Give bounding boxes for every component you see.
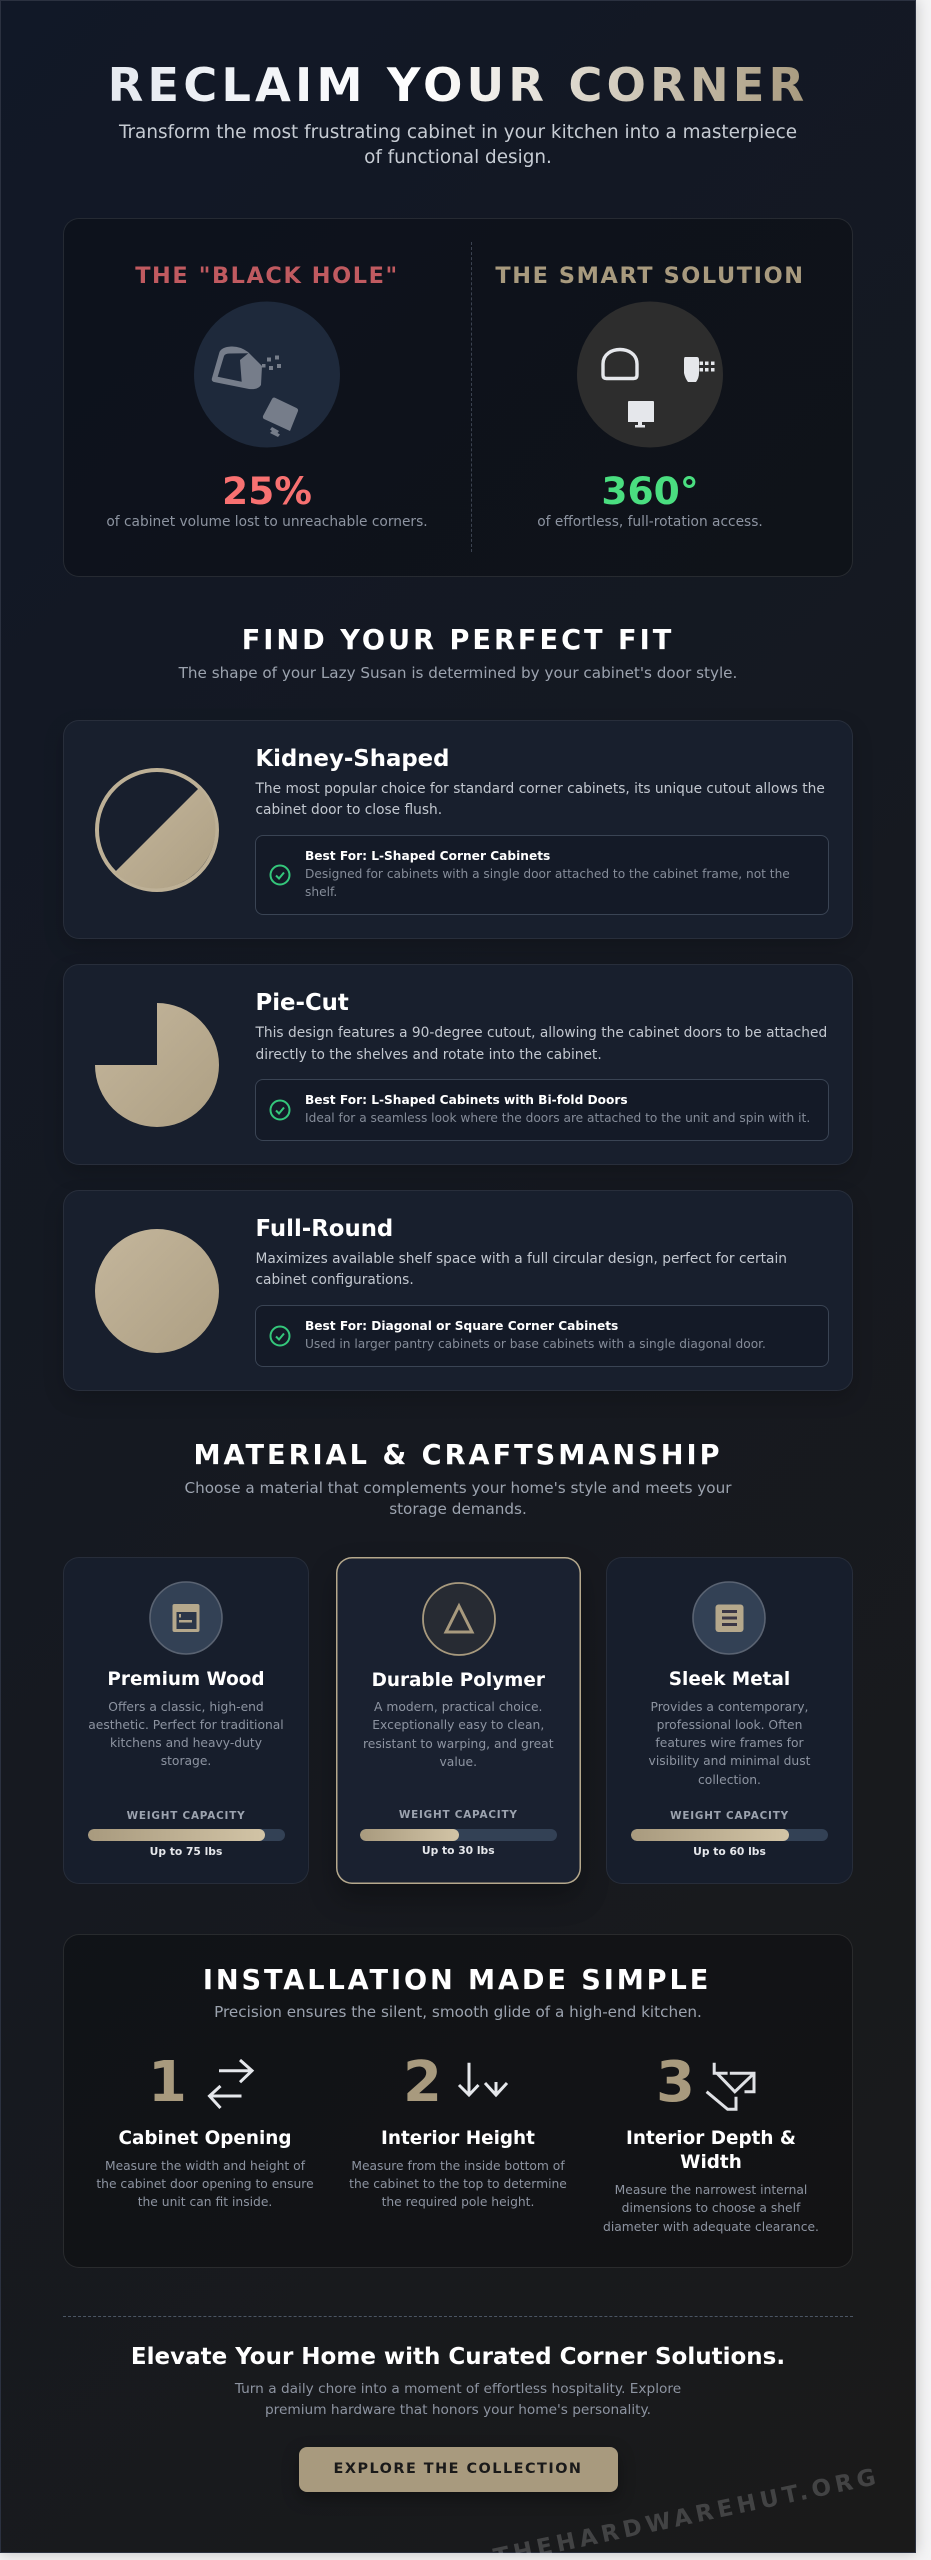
card: premium wood bbox=[63, 1557, 309, 1884]
step 2 description bbox=[349, 2158, 567, 2209]
panel: problem vs solution bbox=[63, 218, 853, 577]
icon: polymer bbox=[422, 1582, 496, 1656]
heading: installation: INSTALLATION MADE SIMPLE bbox=[203, 1964, 711, 1996]
button: explore the collection bbox=[298, 2446, 618, 2492]
step 1 number: 1 bbox=[148, 2050, 187, 2115]
card: full-round bbox=[63, 1190, 853, 1391]
step 3 description: dimensions to choose a shelf bbox=[622, 2201, 800, 2215]
step 1 heading: Cabinet Opening bbox=[118, 2128, 292, 2148]
closing text: Turn a daily chore into a moment of effortless hospitality. Explore bbox=[235, 2380, 681, 2396]
icon: pie-cut shape bbox=[95, 1003, 219, 1127]
stat: 360 degrees: 360° bbox=[601, 469, 699, 513]
step 1 description: Measure the width and height of bbox=[105, 2158, 305, 2172]
step 3 description: diameter with adequate clearance. bbox=[603, 2220, 819, 2234]
divider bbox=[63, 2316, 853, 2317]
heading: Sleek Metal bbox=[669, 1668, 790, 1690]
section heading: material: MATERIAL & CRAFTSMANSHIP bbox=[193, 1440, 722, 1471]
heading: black hole: THE "BLACK HOLE" bbox=[135, 262, 399, 288]
step 2 heading: Interior Height bbox=[381, 2128, 535, 2148]
label: best for: Best For: Diagonal or Square Corner Cabinets bbox=[305, 1318, 618, 1332]
capacity value: Up to 75 lbs bbox=[150, 1845, 222, 1858]
step 3 description bbox=[603, 2183, 819, 2234]
description bbox=[363, 1700, 554, 1769]
description: collection. bbox=[698, 1773, 761, 1787]
icon: wood bbox=[149, 1581, 223, 1655]
step 3 heading bbox=[626, 2128, 796, 2173]
description: resistant to warping, and great bbox=[363, 1737, 554, 1751]
description: storage. bbox=[161, 1754, 211, 1768]
caption: full rotation: of effortless, full-rotation access. bbox=[537, 514, 763, 530]
icon: full-round shape bbox=[95, 1229, 219, 1353]
description: full-round bbox=[256, 1250, 787, 1288]
label: weight capacity: WEIGHT CAPACITY bbox=[127, 1810, 245, 1822]
description: kitchens and heavy-duty bbox=[110, 1736, 262, 1750]
description: pie-cut: This design features a 90-degree cutout, allowing the cabinet doors to be attached bbox=[256, 1025, 827, 1041]
label: weight capacity: WEIGHT CAPACITY bbox=[670, 1810, 789, 1822]
subtitle bbox=[118, 122, 797, 168]
callout: best for L-shaped corner bbox=[255, 834, 828, 914]
description: visibility and minimal dust bbox=[649, 1754, 810, 1768]
step 3 number: 3 bbox=[656, 2050, 695, 2115]
panel: installation bbox=[63, 1934, 853, 2268]
step 1 description: the cabinet door opening to ensure bbox=[96, 2177, 314, 2191]
divider bbox=[471, 242, 472, 552]
capacity value: Up to 60 lbs bbox=[693, 1845, 766, 1858]
heading: kidney-shaped: Kidney-Shaped bbox=[256, 746, 449, 772]
icon: organised smart solution circle bbox=[577, 302, 723, 448]
description: full-round: Maximizes available shelf space with a full circular design, perfect for certain bbox=[256, 1250, 787, 1266]
note: Used in larger pantry cabinets or base cabinets with a single diagonal door. bbox=[305, 1336, 766, 1350]
heading: Premium Wood bbox=[107, 1668, 265, 1690]
label: weight capacity: WEIGHT CAPACITY bbox=[399, 1809, 518, 1821]
card: durable polymer bbox=[336, 1557, 581, 1884]
description: kidney-shaped: cabinet door to close flush. bbox=[256, 802, 442, 818]
stat: 25%: 25% bbox=[222, 469, 312, 513]
heading: full-round: Full-Round bbox=[256, 1216, 393, 1242]
heading: Durable Polymer bbox=[372, 1670, 545, 1690]
step 3 heading: Width bbox=[680, 2152, 742, 2173]
description: professional look. Often bbox=[657, 1718, 802, 1732]
title: RECLAIM YOUR CORNER bbox=[108, 58, 808, 112]
icon: height arrows bbox=[458, 2062, 508, 2098]
icon: check bbox=[270, 1100, 290, 1120]
section intro: material bbox=[185, 1479, 732, 1518]
description: value. bbox=[440, 1755, 477, 1769]
label: best for: Best For: L-Shaped Cabinets with Bi-fold Doors bbox=[305, 1093, 628, 1107]
description bbox=[88, 1700, 284, 1768]
icon: kidney shape bbox=[95, 768, 219, 892]
icon: depth arrows bbox=[706, 2062, 756, 2111]
icon: width arrows bbox=[207, 2059, 254, 2109]
description: Offers a classic, high-end bbox=[108, 1700, 264, 1714]
card: sleek metal bbox=[606, 1557, 853, 1884]
step 2 number: 2 bbox=[403, 2050, 442, 2115]
intro: installation: Precision ensures the silent, smooth glide of a high-end kitchen. bbox=[214, 2002, 702, 2020]
step 3 heading: Interior Depth & bbox=[626, 2128, 796, 2148]
button: explore the collection: EXPLORE THE COLLECTION bbox=[334, 2460, 582, 2476]
description: kidney-shaped: The most popular choice for standard corner cabinets, its unique cutout allows the bbox=[256, 780, 825, 796]
note bbox=[305, 867, 790, 899]
step 2 description: the required pole height. bbox=[382, 2195, 534, 2209]
card: kidney-shaped bbox=[63, 720, 853, 939]
section intro: material: Choose a material that complements your home's style and meets your bbox=[185, 1479, 731, 1497]
section intro: door style: The shape of your Lazy Susan is determined by your cabinet's door style. bbox=[179, 664, 737, 682]
callout: best for bi-fold bbox=[255, 1078, 828, 1140]
description: kidney-shaped bbox=[255, 780, 825, 818]
icon: check bbox=[270, 1326, 290, 1346]
description: aesthetic. Perfect for traditional bbox=[88, 1718, 284, 1732]
section heading: find your perfect fit: FIND YOUR PERFECT FIT bbox=[242, 625, 674, 656]
section intro: material: storage demands. bbox=[389, 1500, 527, 1518]
description: pie-cut bbox=[255, 1025, 827, 1063]
label: best for: Best For: L-Shaped Corner Cabinets bbox=[305, 848, 550, 862]
description: pie-cut: directly to the shelves and rotate into the cabinet. bbox=[256, 1047, 602, 1063]
subtitle: Transform the most frustrating cabinet in your kitchen into a masterpiece bbox=[119, 122, 797, 143]
icon: metal bbox=[692, 1581, 766, 1655]
description bbox=[648, 1700, 810, 1787]
description: features wire frames for bbox=[655, 1736, 804, 1750]
step 1 description bbox=[96, 2158, 314, 2209]
capacity value: Up to 30 lbs bbox=[422, 1844, 495, 1857]
callout: best for diagonal bbox=[255, 1304, 828, 1366]
note: shelf. bbox=[305, 885, 337, 899]
closing text bbox=[234, 2380, 681, 2418]
description: A modern, practical choice. bbox=[374, 1700, 542, 1714]
card: pie-cut bbox=[63, 964, 853, 1165]
caption: volume lost: of cabinet volume lost to unreachable corners. bbox=[106, 514, 428, 530]
closing text: premium hardware that honors your home's personality. bbox=[265, 2402, 651, 2418]
description: Provides a contemporary, bbox=[651, 1700, 808, 1714]
capacity bar bbox=[88, 1829, 285, 1841]
step 2 description: Measure from the inside bottom of bbox=[351, 2158, 565, 2172]
icon: check bbox=[270, 864, 290, 886]
step 2 description: the cabinet to the top to determine bbox=[349, 2177, 567, 2191]
capacity bar bbox=[631, 1829, 828, 1841]
step 3 description: Measure the narrowest internal bbox=[615, 2183, 807, 2197]
note: Designed for cabinets with a single door attached to the cabinet frame, not the bbox=[305, 867, 790, 881]
note: Ideal for a seamless look where the doors are attached to the unit and spin with it. bbox=[305, 1111, 810, 1125]
heading: pie-cut: Pie-Cut bbox=[256, 990, 349, 1016]
step 1 description: the unit can fit inside. bbox=[138, 2195, 272, 2209]
heading: smart solution: THE SMART SOLUTION bbox=[495, 262, 805, 288]
description: Exceptionally easy to clean, bbox=[372, 1718, 544, 1732]
closing heading: Elevate Your Home with Curated Corner Solutions. bbox=[131, 2344, 785, 2370]
capacity bar bbox=[360, 1828, 557, 1840]
subtitle: of functional design. bbox=[364, 146, 552, 168]
description: full-round: cabinet configurations. bbox=[256, 1272, 414, 1288]
icon: cluttered black hole circle bbox=[194, 302, 340, 448]
